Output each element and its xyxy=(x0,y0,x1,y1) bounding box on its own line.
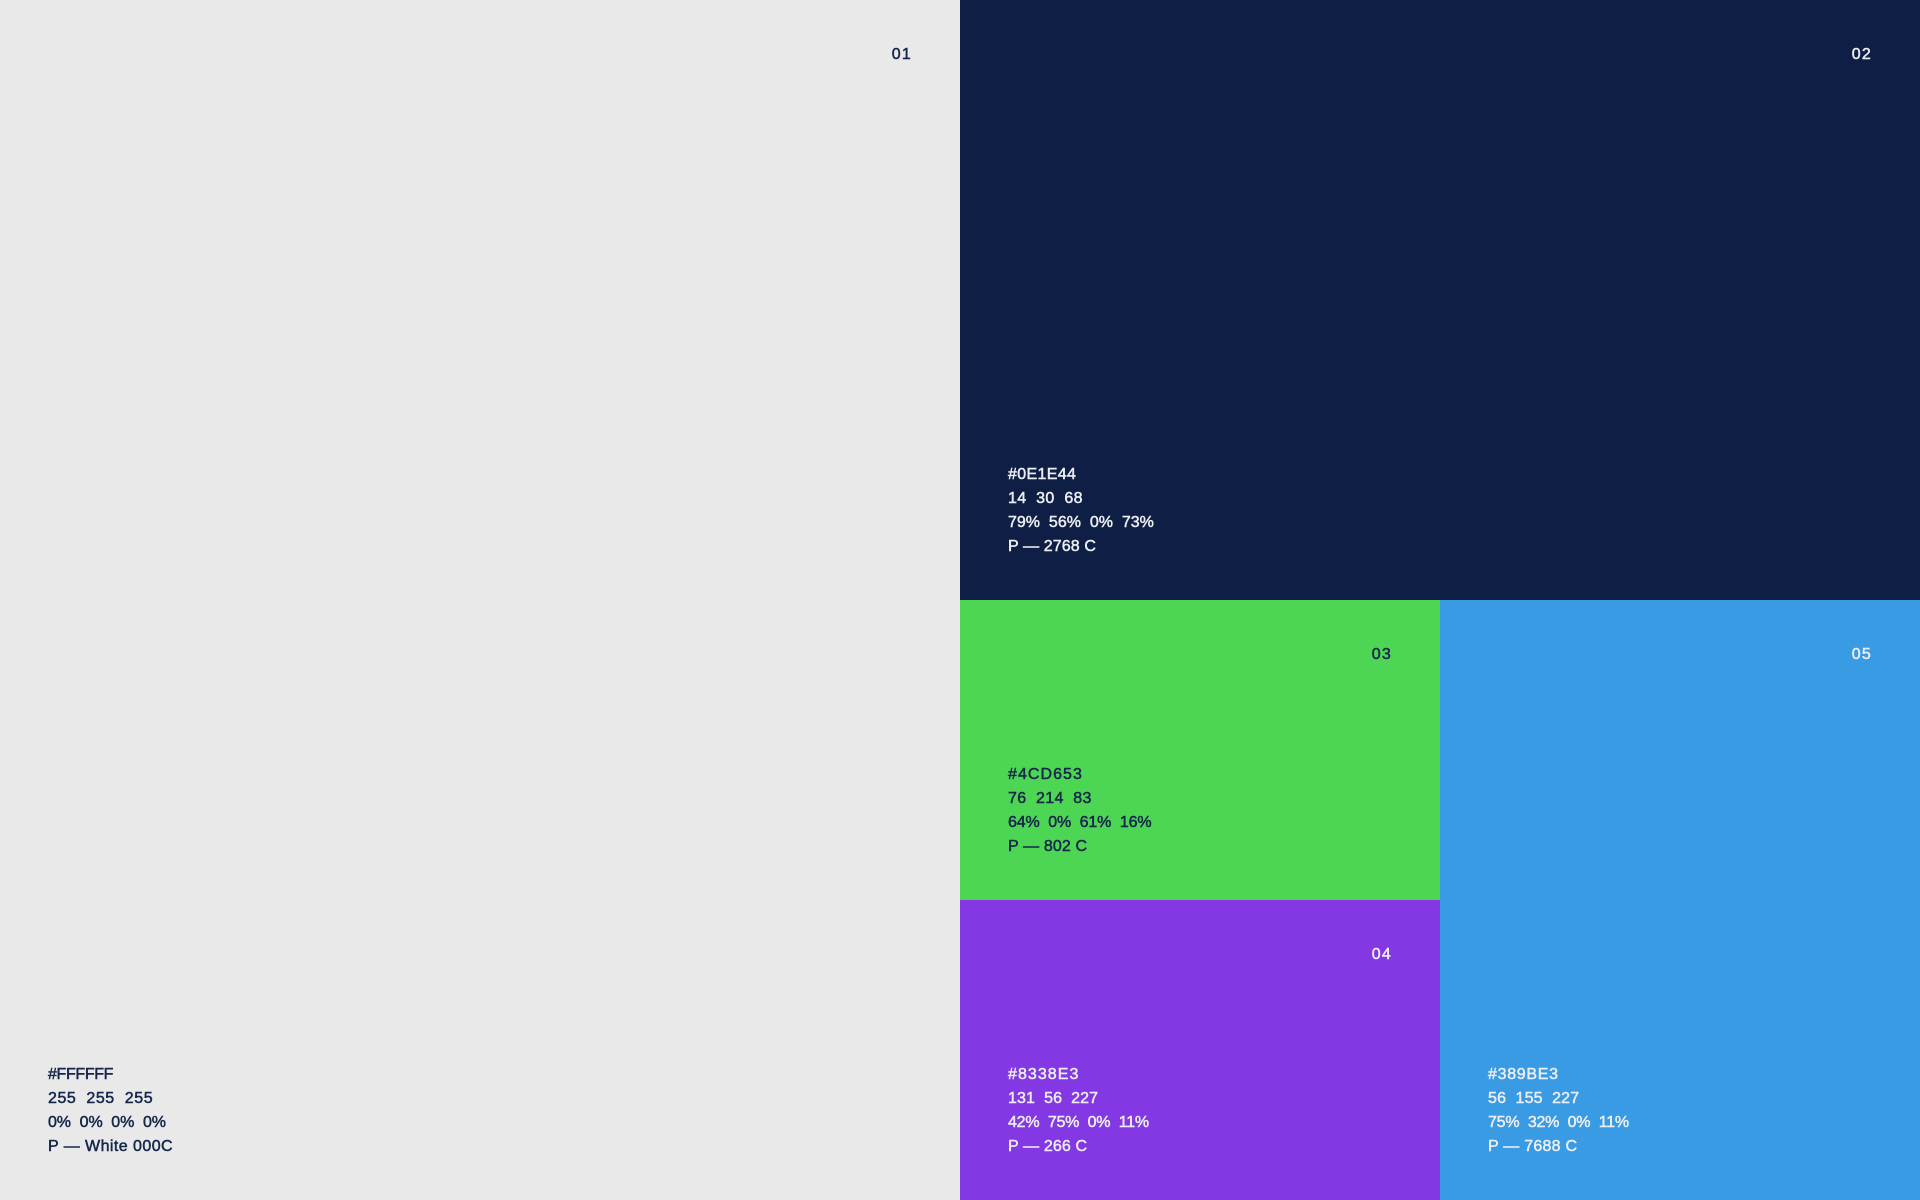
swatch number 04: 04 xyxy=(1372,946,1392,963)
colour values 04: 131 56 227 xyxy=(1008,1090,1098,1107)
colour values 03: 64% 0% 61% 16% xyxy=(1008,814,1152,831)
swatch number 01: 01 xyxy=(892,46,912,63)
panel: 05 blue swatch xyxy=(1440,600,1920,1200)
colour values 04 xyxy=(1008,1066,1149,1155)
colour values 05 xyxy=(1488,1066,1629,1155)
colour values 01: 0% 0% 0% 0% xyxy=(48,1114,166,1131)
colour values 05: 56 155 227 xyxy=(1488,1090,1579,1107)
colour values 04: 42% 75% 0% 11% xyxy=(1008,1114,1149,1131)
colour values 05: P — 7688 C xyxy=(1488,1138,1577,1155)
colour values 02: 79% 56% 0% 73% xyxy=(1008,514,1154,531)
colour values 02: P — 2768 C xyxy=(1008,538,1096,555)
colour values 01: #FFFFFF xyxy=(48,1066,113,1083)
colour values 02: #0E1E44 xyxy=(1008,466,1076,483)
colour values 04: P — 266 C xyxy=(1008,1138,1087,1155)
colour values 01: 255 255 255 xyxy=(48,1090,153,1107)
colour values 01 xyxy=(48,1066,173,1155)
colour values 04: #8338E3 xyxy=(1008,1066,1079,1083)
colour values 02 xyxy=(1008,466,1154,555)
panel: 03 green swatch xyxy=(960,600,1440,900)
swatch number 03: 03 xyxy=(1372,646,1392,663)
panel: 01 white swatch xyxy=(0,0,960,1200)
panel: 04 purple swatch xyxy=(960,900,1440,1200)
swatch number 05: 05 xyxy=(1852,646,1872,663)
colour values 03 xyxy=(1008,766,1152,855)
colour values 02: 14 30 68 xyxy=(1008,490,1083,507)
colour values 03: 76 214 83 xyxy=(1008,790,1092,807)
colour values 05: #389BE3 xyxy=(1488,1066,1559,1083)
panel: 02 navy swatch xyxy=(960,0,1920,600)
swatch number 02: 02 xyxy=(1852,46,1872,63)
colour values 03: #4CD653 xyxy=(1008,766,1083,783)
colour values 05: 75% 32% 0% 11% xyxy=(1488,1114,1629,1131)
colour values 01: P — White 000C xyxy=(48,1138,173,1155)
colour values 03: P — 802 C xyxy=(1008,838,1087,855)
